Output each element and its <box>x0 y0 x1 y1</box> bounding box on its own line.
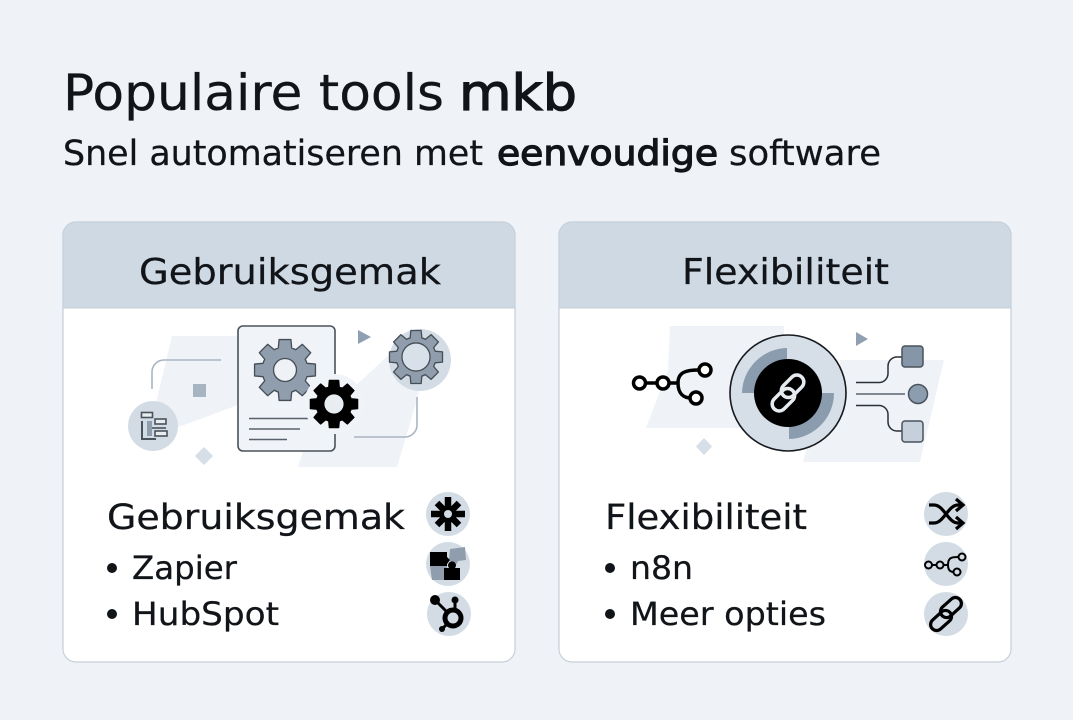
subtitle: eenvoudige <box>497 134 718 174</box>
header band <box>63 222 515 308</box>
list item: n8n <box>605 549 693 587</box>
title: Populaire tools <box>63 64 444 122</box>
subheading: Gebruiksgemak <box>107 498 406 538</box>
gear on document <box>255 340 315 400</box>
document <box>238 326 335 451</box>
panel heading: Gebruiksgemak <box>139 252 441 293</box>
panel: Gebruiksgemak <box>63 222 515 662</box>
triangle accent <box>856 332 868 346</box>
list item: n8n: n8n <box>630 549 693 587</box>
header band <box>559 222 1011 308</box>
card background <box>559 222 1011 662</box>
backdrop shapes <box>646 326 944 462</box>
card background <box>63 222 515 662</box>
subtitle <box>63 134 881 174</box>
icon: Zapier asterisk <box>426 492 470 536</box>
illustration: document with gears <box>128 326 451 467</box>
list item: HubSpot: HubSpot <box>132 595 279 633</box>
icon: link <box>924 592 968 636</box>
node graph left <box>634 364 711 404</box>
connector right <box>354 397 417 437</box>
title: mkb <box>459 64 577 122</box>
panel heading: Flexibiliteit <box>682 252 889 293</box>
icon: flow diagram <box>128 401 178 451</box>
icon: puzzle <box>426 542 470 586</box>
list item: Zapier: Zapier <box>132 549 238 587</box>
black gear <box>304 374 364 434</box>
triangle accent <box>358 330 371 344</box>
output nodes <box>902 346 928 442</box>
central hub <box>730 335 846 451</box>
illustration: central link hub <box>634 326 944 462</box>
subtitle: Snel automatiseren met <box>63 134 483 174</box>
icon: HubSpot <box>427 592 471 636</box>
icon: shuffle <box>924 492 968 536</box>
backdrop shapes <box>150 336 420 467</box>
subheading: Flexibiliteit <box>605 498 807 538</box>
diamond accent <box>195 447 213 465</box>
connector left <box>152 360 221 389</box>
panel: Flexibiliteit <box>559 222 1011 662</box>
diamond accent <box>696 438 712 455</box>
connector lines <box>856 357 905 431</box>
icon: nodes <box>924 542 968 586</box>
list item: Meer opties: Meer opties <box>630 595 826 633</box>
subtitle: software <box>729 134 881 174</box>
square accent <box>193 384 206 397</box>
gear top right <box>389 329 451 391</box>
